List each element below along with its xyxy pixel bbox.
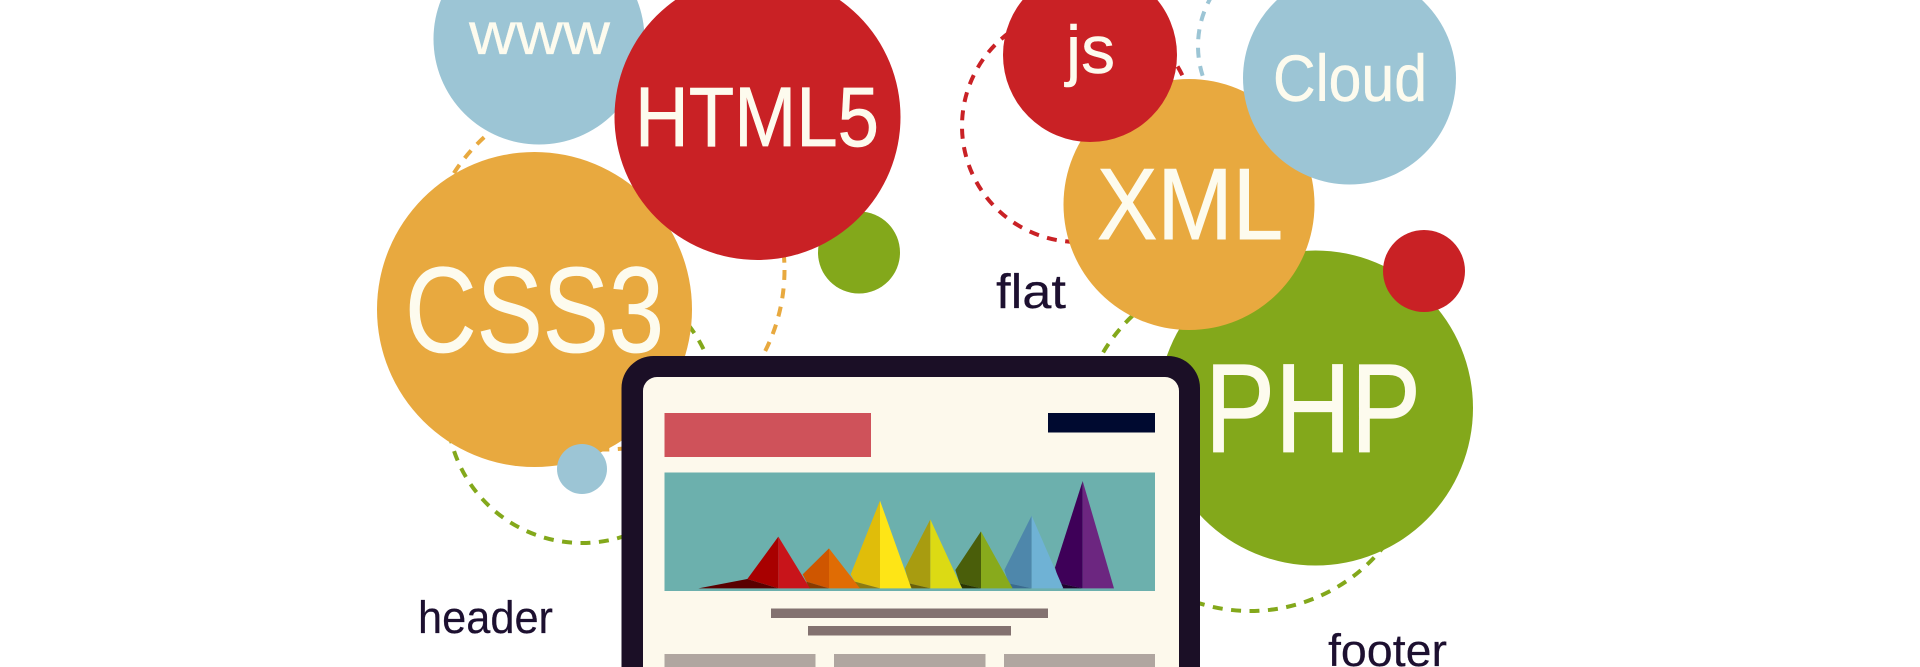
tablet frame (622, 356, 1200, 667)
bubble: small red dot (1383, 230, 1465, 312)
olive pyramid (905, 519, 962, 588)
red pyramid (698, 537, 810, 588)
page subheadline bar (808, 626, 1011, 636)
content block middle (834, 654, 986, 667)
dashed connector: green ring right (1079, 269, 1421, 611)
label: header: header (418, 592, 553, 643)
bubble: CSS3: CSS3 (405, 242, 664, 378)
bubble: small green dot (818, 212, 900, 294)
tablet screen (643, 377, 1179, 667)
page headline bar (771, 608, 1048, 618)
dashed connector: red ring (962, 10, 1194, 242)
bubble: PHP (1158, 250, 1473, 566)
content block left (664, 654, 816, 667)
label: flat: flat (996, 266, 1066, 319)
bubble: Cloud (1243, 0, 1456, 184)
content block right (1004, 654, 1155, 667)
bubble: CSS3 (377, 152, 692, 467)
bubble: XML: XML (1097, 149, 1283, 261)
bubble: Cloud: Cloud (1273, 41, 1427, 115)
dashed connector: orange ring (426, 90, 784, 450)
bubble: HTML5: HTML5 (635, 70, 879, 164)
yellow pyramid (851, 501, 911, 588)
bubble: www (434, 0, 644, 144)
blue pyramid (1004, 516, 1063, 588)
dashed connector: green ring left (447, 273, 717, 543)
orange pyramid (803, 548, 860, 588)
bubble: js: js (1064, 12, 1115, 88)
bubble: small blue dot (557, 444, 607, 494)
bubble: www: www (468, 1, 610, 67)
page logo block (664, 413, 871, 457)
green pyramid (955, 531, 1013, 588)
pyramid chart (698, 481, 1114, 588)
page nav block (1048, 413, 1155, 432)
purple pyramid (1055, 481, 1114, 588)
bubble: HTML5 (614, 0, 900, 260)
bubble: XML (1064, 79, 1314, 330)
hero banner with pyramid chart (664, 472, 1155, 591)
bubble: js (1003, 0, 1177, 142)
bubble: PHP: PHP (1205, 338, 1421, 479)
tablet device (622, 356, 1200, 667)
dashed connector: blue ring (1198, 0, 1394, 144)
